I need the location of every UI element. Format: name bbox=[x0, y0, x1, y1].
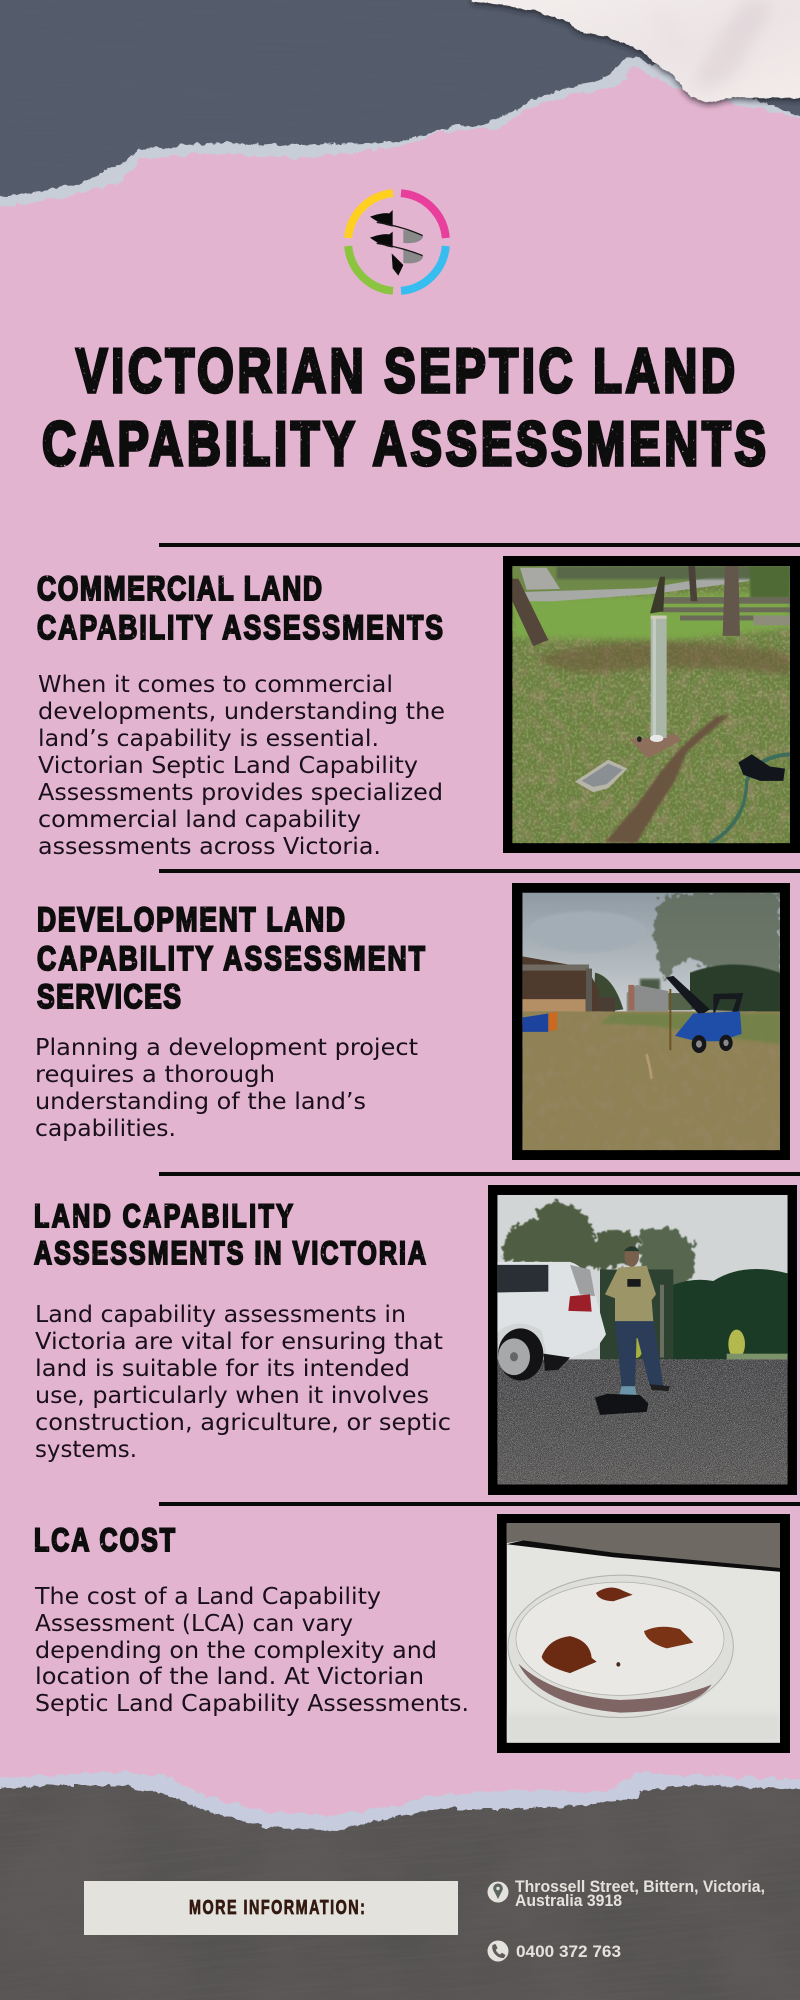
icon: phone bbox=[488, 1940, 508, 1962]
text: commercial: commercial land capability bbox=[38, 805, 361, 833]
text: LCA cost: The cost of a Land Capability bbox=[34, 1582, 381, 1610]
title bbox=[42, 336, 766, 479]
text: commercial: Victorian Septic Land Capability bbox=[38, 751, 418, 779]
text: land capability: construction, agriculture, or septic bbox=[35, 1408, 451, 1436]
torn paper lower fibre band over charcoal bbox=[0, 1700, 800, 1830]
address with pin icon: Australia 3918 bbox=[515, 1892, 622, 1910]
icon: location pin bbox=[488, 1882, 508, 1902]
address with pin icon bbox=[488, 1878, 765, 1910]
photo: percolation test tube on grass bbox=[503, 556, 800, 853]
text: development bbox=[35, 1033, 418, 1142]
address with pin icon: Throssell Street, Bittern, Victoria, bbox=[515, 1878, 765, 1896]
phone with icon: 0400 372 763 bbox=[516, 1942, 621, 1961]
section divider rules bbox=[159, 543, 800, 1506]
heading: land capability: LAND CAPABILITY bbox=[34, 1199, 293, 1235]
text: commercial: When it comes to commercial bbox=[38, 670, 393, 698]
text: land capability: Victoria are vital for ensuring that bbox=[35, 1327, 443, 1355]
text: commercial: land’s capability is essential. bbox=[38, 724, 379, 752]
text: land capability: systems. bbox=[35, 1435, 137, 1463]
text: land capability bbox=[35, 1300, 451, 1463]
photo: soil samples in petri dish bbox=[497, 1514, 790, 1753]
text: LCA cost: depending on the complexity and bbox=[35, 1636, 437, 1664]
heading: development bbox=[37, 901, 425, 1016]
text: commercial bbox=[38, 670, 445, 860]
heading: development: SERVICES bbox=[37, 978, 181, 1016]
photo: surveyor with white car on gravel bbox=[488, 1185, 797, 1495]
title: VICTORIAN SEPTIC LAND bbox=[76, 336, 735, 406]
text: LCA cost: location of the land. At Victorian bbox=[35, 1662, 424, 1690]
text: commercial: assessments across Victoria. bbox=[38, 832, 381, 860]
text: development: Planning a development project bbox=[35, 1033, 418, 1061]
text: LCA cost: Septic Land Capability Assessments. bbox=[35, 1689, 469, 1717]
heading: land capability bbox=[34, 1199, 426, 1272]
text: land capability: use, particularly when it involves bbox=[35, 1381, 429, 1409]
text: commercial: developments, understanding the bbox=[38, 697, 445, 725]
text: development: understanding of the land’s bbox=[35, 1087, 366, 1115]
text: land capability: Land capability assessments in bbox=[35, 1300, 406, 1328]
heading: commercial: CAPABILITY ASSESSMENTS bbox=[37, 609, 443, 647]
text: development: capabilities. bbox=[35, 1114, 176, 1142]
more information box: MORE INFORMATION: bbox=[189, 1896, 365, 1919]
text: land capability: land is suitable for its intended bbox=[35, 1354, 410, 1382]
heading: commercial bbox=[37, 570, 443, 647]
heading: land capability: ASSESSMENTS IN VICTORIA bbox=[34, 1236, 426, 1272]
logo: auger in coloured ring bbox=[348, 193, 446, 291]
text: LCA cost: Assessment (LCA) can vary bbox=[35, 1609, 353, 1637]
background: charcoal textured paper at bottom bbox=[0, 1682, 800, 2000]
torn white paper, top-right corner bbox=[472, 0, 800, 102]
more information box bbox=[84, 1881, 458, 1935]
heading: LCA cost: LCA COST bbox=[34, 1523, 175, 1559]
title: CAPABILITY ASSESSMENTS bbox=[42, 409, 766, 479]
heading: development: CAPABILITY ASSESSMENT bbox=[37, 940, 425, 978]
photo: blue excavator with auger in dry yard bbox=[512, 883, 800, 1160]
heading: development: DEVELOPMENT LAND bbox=[37, 901, 345, 939]
heading: commercial: COMMERCIAL LAND bbox=[37, 570, 322, 608]
text: commercial: Assessments provides specialized bbox=[38, 778, 443, 806]
background: slate textured paper at top bbox=[0, 0, 800, 240]
text: development: requires a thorough bbox=[35, 1060, 275, 1088]
text: LCA cost bbox=[34, 1582, 469, 1717]
